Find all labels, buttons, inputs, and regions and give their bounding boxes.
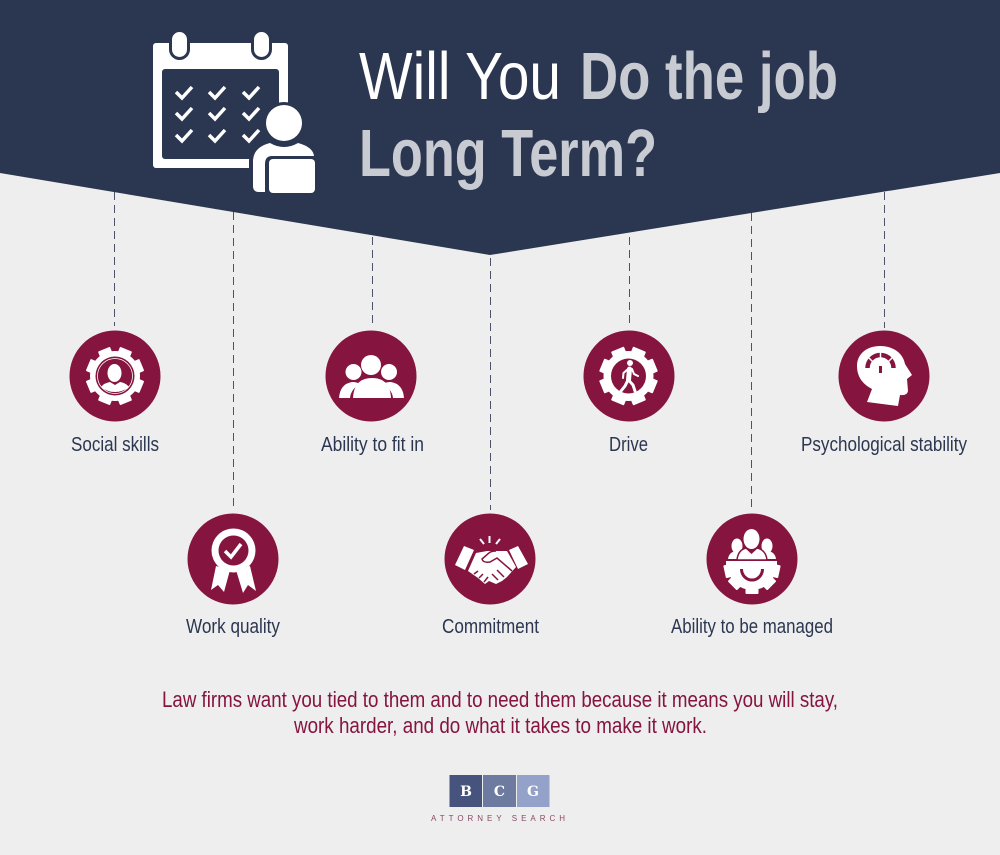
logo: BCG Attorney Search: C — [494, 784, 505, 800]
title — [359, 39, 838, 191]
icon: gear with person — [86, 347, 144, 405]
icon: handshake — [455, 536, 528, 584]
logo: BCG Attorney Search: B — [460, 784, 472, 800]
icon: calendar with person — [153, 30, 318, 195]
icon: head with gauge — [857, 346, 912, 406]
label: Social skills — [71, 434, 159, 456]
item: psychological stability — [801, 330, 967, 456]
item: social skills — [70, 330, 160, 456]
item: ability to fit in — [321, 330, 424, 456]
item: ability to be managed — [671, 514, 833, 638]
dashed connector lines — [114, 192, 884, 510]
icon: award ribbon with check — [211, 528, 256, 593]
closing statement: work harder, and do what it takes to make it work. — [293, 713, 707, 738]
logo: BCG Attorney Search: ATTORNEY SEARCH — [431, 814, 565, 823]
icon: team over gear — [723, 529, 781, 594]
label: Ability to be managed — [671, 616, 833, 638]
label: Commitment — [442, 616, 539, 638]
logo: BCG Attorney Search: G — [527, 784, 539, 800]
item: drive — [584, 330, 674, 456]
item: work quality — [186, 514, 280, 638]
label: Psychological stability — [801, 434, 967, 456]
logo: BCG Attorney Search — [431, 775, 565, 823]
closing statement — [162, 687, 838, 738]
header banner — [0, 0, 1000, 255]
title: Long Term? — [359, 116, 657, 191]
title: Will You — [359, 39, 561, 114]
label: Work quality — [186, 616, 280, 638]
item: commitment — [442, 514, 539, 638]
icon: group of people — [339, 355, 404, 398]
title: Do the job — [580, 39, 838, 114]
closing statement: Law firms want you tied to them and to need them because it means you will stay, — [162, 687, 838, 712]
label: Drive — [609, 434, 648, 456]
icon: gear with walking man — [599, 347, 658, 405]
label: Ability to fit in — [321, 434, 424, 456]
